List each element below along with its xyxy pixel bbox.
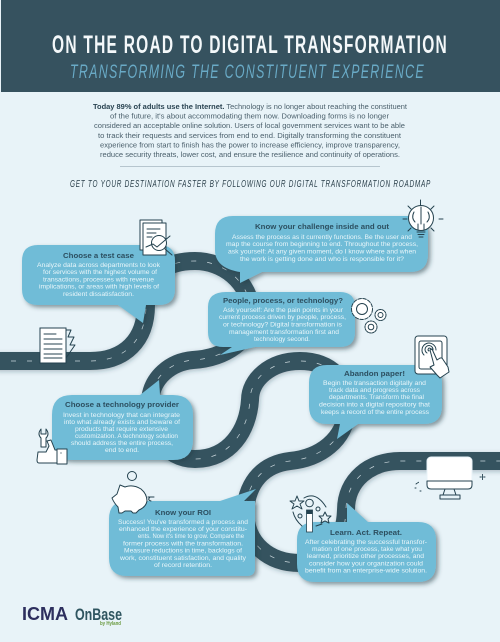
icon: magic wand and stars <box>290 496 331 532</box>
panel: know your challenge <box>215 216 428 283</box>
panel: know your roi: Measure reductions in time, backlogs of <box>124 548 242 554</box>
panel: learn act repeat: consider how your organization could <box>309 560 423 567</box>
intro paragraph: considered an acceptable online solution. Users of local government services want to be able <box>94 123 405 130</box>
panel: choose a test case: Choose a test case <box>63 251 134 260</box>
intro paragraph: reduce security threats, lower cost, and ensure the resilience and continuity of operations. <box>100 152 400 159</box>
panel: know your roi: Know your ROI <box>155 508 211 517</box>
panel: abandon paper: Begin the transaction digitally and <box>323 380 426 387</box>
panel: learn act repeat: After celebrating the successful transfor- <box>305 539 427 546</box>
panel: know your roi: ents. Now it's time to grow. Compare the <box>138 533 244 540</box>
logo: OnBase by Hyland: by Hyland <box>100 621 121 627</box>
panel: know your challenge: map the course from beginning to end. Throughout the process, <box>226 241 418 248</box>
panel: people, process, or technology: Ask yourself: Are the pain points in your <box>223 307 344 314</box>
panel: know your challenge: Know your challenge inside and out <box>255 222 389 231</box>
icon: wrench and thumbs up <box>37 429 67 464</box>
panel: people, process, or technology: People, process, or technology? <box>223 296 343 305</box>
panel: choose a technology provider: Choose a technology provider <box>65 400 179 409</box>
panel: choose a test case: resident dissatisfaction. <box>63 291 134 298</box>
icon: documents with magnifier <box>140 220 172 255</box>
panel: know your challenge: the work is getting done and who is responsible for it? <box>240 256 404 263</box>
panel: choose a technology provider: customization. A technology solution <box>75 433 178 440</box>
icon: brain light bulb <box>403 200 443 237</box>
panel: people, process, or technology: technology second. <box>254 336 310 343</box>
panel: choose a technology provider: should address the entire process, <box>71 440 173 447</box>
panel: know your challenge: Assess the process as it currently functions. Be the user and <box>232 234 412 241</box>
panel: learn act repeat: learned, prioritize other processes, and <box>307 553 424 560</box>
panel: know your roi: enhanced the experience of your constitu- <box>119 526 247 533</box>
panel: abandon paper <box>309 365 442 439</box>
panel: abandon paper: track data and progress across <box>329 387 421 394</box>
icon: desktop monitor <box>415 457 485 499</box>
icon: gears <box>352 298 386 333</box>
panel: choose a test case: for services with the highest volume of <box>43 269 157 276</box>
panel: choose a technology provider: into what already exists and beware of <box>64 419 180 426</box>
icon: tablet with touch <box>415 336 449 378</box>
panel: abandon paper: keeps a record of the entire process <box>321 409 430 416</box>
panel: choose a test case: implications, or areas with high levels of <box>39 284 159 291</box>
panel: choose a technology provider: Invest in technology that can integrate <box>63 412 180 419</box>
panel: know your challenge: ask yourself: At any given moment, do I know where and when <box>228 249 416 256</box>
panel: know your roi: work, constituent satisfaction, and quality <box>119 555 247 562</box>
intro paragraph: to track their requests and services from end to end. Digitally transforming the constituent <box>98 133 401 140</box>
header banner <box>1 0 500 92</box>
panel: people, process, or technology: management transformation first and <box>229 329 339 336</box>
icon: paper stack <box>40 328 75 363</box>
panel: abandon paper: Abandon paper! <box>344 369 405 378</box>
panel: know your roi: of record retention. <box>154 562 212 569</box>
panel: abandon paper: departments. Transform the final <box>329 394 425 401</box>
panel: choose a test case: transactions, processes with revenue <box>43 276 154 283</box>
panel: learn act repeat <box>297 503 436 582</box>
panel: know your roi: Success! You've transformed a process and <box>118 519 248 526</box>
icon: piggy bank <box>112 472 154 513</box>
intro paragraph: Today 89% of adults use the Internet. Technology is no longer about reaching the constituent <box>93 104 407 111</box>
logo: ICMA: ICMA <box>22 604 68 624</box>
panel: people, process, or technology <box>208 292 355 355</box>
panel: know your roi: former process with the transformation. <box>123 540 243 547</box>
panel: choose a technology provider <box>52 380 193 460</box>
panel: learn act repeat: mation of one process, take what you <box>312 546 422 553</box>
panel: choose a test case <box>22 245 175 323</box>
winding road <box>0 261 500 563</box>
panel: people, process, or technology: or technology? Digital transformation is <box>223 322 343 328</box>
panel: learn act repeat: Learn. Act. Repeat. <box>330 528 402 537</box>
logo: OnBase by Hyland <box>75 606 122 627</box>
logo: OnBase by Hyland: OnBase <box>75 606 122 624</box>
panel: abandon paper: decision into a digital repository that <box>319 402 430 408</box>
panel: people, process, or technology: current process driven by people, process, <box>219 314 346 321</box>
intro paragraph <box>93 104 407 159</box>
panel: choose a technology provider: products that require extensive <box>75 426 168 433</box>
intro paragraph: experience from start to finish has the power to increase efficiency, improve transparency, <box>100 142 400 149</box>
panel: know your roi <box>109 489 256 576</box>
panel: learn act repeat: benefit from an enterprise-wide solution. <box>305 568 427 574</box>
intro paragraph: of the future, it's about accommodating them now. Downloading forms is no longer <box>110 114 390 121</box>
panel: choose a technology provider: end to end. <box>105 447 139 454</box>
panel: choose a test case: Analyze data across departments to look <box>37 262 161 269</box>
